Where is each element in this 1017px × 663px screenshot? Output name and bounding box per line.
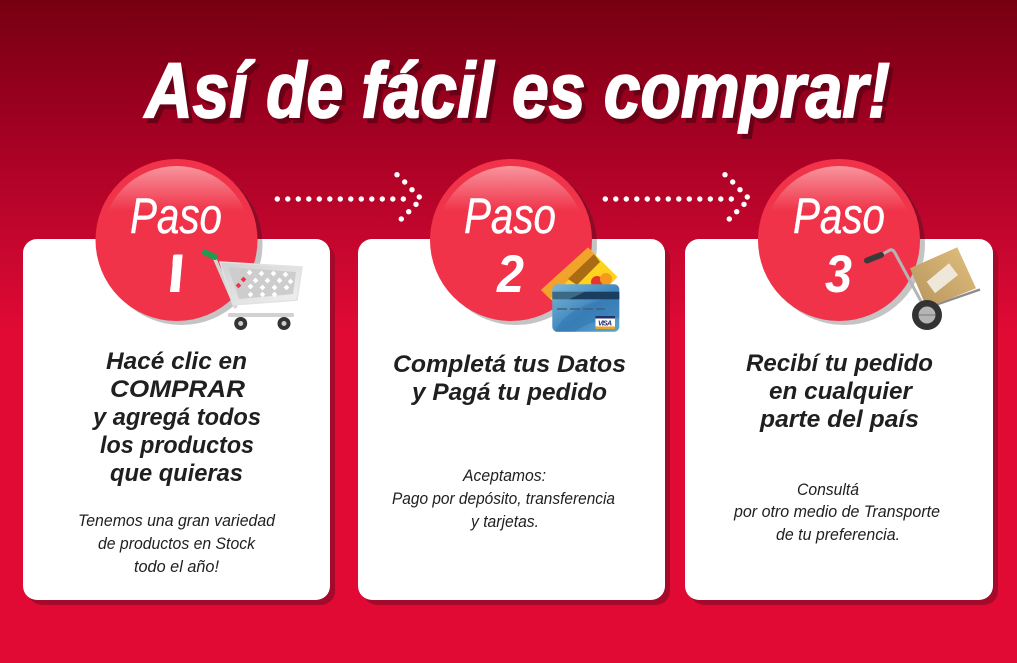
heading: step 3: parte del país xyxy=(759,406,919,433)
arrow: step 2 to step 3 xyxy=(603,172,750,222)
badge: paso 3 xyxy=(758,159,925,325)
text: step 1 body xyxy=(78,511,276,576)
heading: step 1 xyxy=(92,348,261,487)
badge: paso 2: Paso xyxy=(464,188,556,244)
icon: credit cards: VISA xyxy=(598,320,612,328)
badge: paso 3: 3 xyxy=(825,245,852,304)
text: step 1 body: todo el año! xyxy=(134,557,219,576)
heading: step 2: y Pagá tu pedido xyxy=(411,379,607,406)
badge: paso 1: 1 xyxy=(158,245,192,304)
text: step 2 body: y tarjetas. xyxy=(470,512,539,531)
badge: paso 1 xyxy=(96,159,262,325)
icon: credit cards xyxy=(541,248,619,332)
text: step 1 body: de productos en Stock xyxy=(98,534,256,553)
badge: paso 3: Paso xyxy=(793,188,885,244)
text: step 2 body: Aceptamos: xyxy=(462,466,546,485)
badge: paso 1: Paso xyxy=(130,188,222,244)
arrow: step 1 to step 2 xyxy=(275,172,422,222)
icon: hand truck with box xyxy=(867,247,980,330)
heading: step 3: en cualquier xyxy=(769,378,914,405)
title: Así de fácil es comprar! xyxy=(143,46,890,134)
badge: paso 2 xyxy=(430,159,597,325)
panel: step 2 xyxy=(358,159,670,605)
badge: paso 2: 2 xyxy=(496,245,524,304)
text: step 2 body: Pago por depósito, transferencia xyxy=(392,489,615,508)
heading: step 1: y agregá todos xyxy=(92,404,261,431)
heading: step 3: Recibí tu pedido xyxy=(746,350,933,377)
text: step 1 body: Tenemos una gran variedad xyxy=(78,511,276,530)
title: Así de fácil es comprar! xyxy=(147,51,894,139)
text: step 2 body xyxy=(392,466,615,531)
heading: step 2 xyxy=(393,351,626,406)
text: step 3 body: de tu preferencia. xyxy=(776,525,900,544)
text: step 3 body: por otro medio de Transporte xyxy=(733,502,940,521)
panel: step 3 xyxy=(685,159,998,605)
text: step 3 body xyxy=(733,480,940,544)
panel: step 1 xyxy=(23,159,335,605)
heading: step 1: COMPRAR xyxy=(110,376,246,403)
heading: step 1: Hacé clic en xyxy=(106,348,247,375)
heading: step 3 xyxy=(746,350,933,433)
heading: step 1: los productos xyxy=(100,432,254,459)
icon: shopping cart xyxy=(205,252,302,330)
heading: step 1: que quieras xyxy=(110,460,243,487)
heading: step 2: Completá tus Datos xyxy=(393,351,626,378)
text: step 3 body: Consultá xyxy=(797,480,859,499)
